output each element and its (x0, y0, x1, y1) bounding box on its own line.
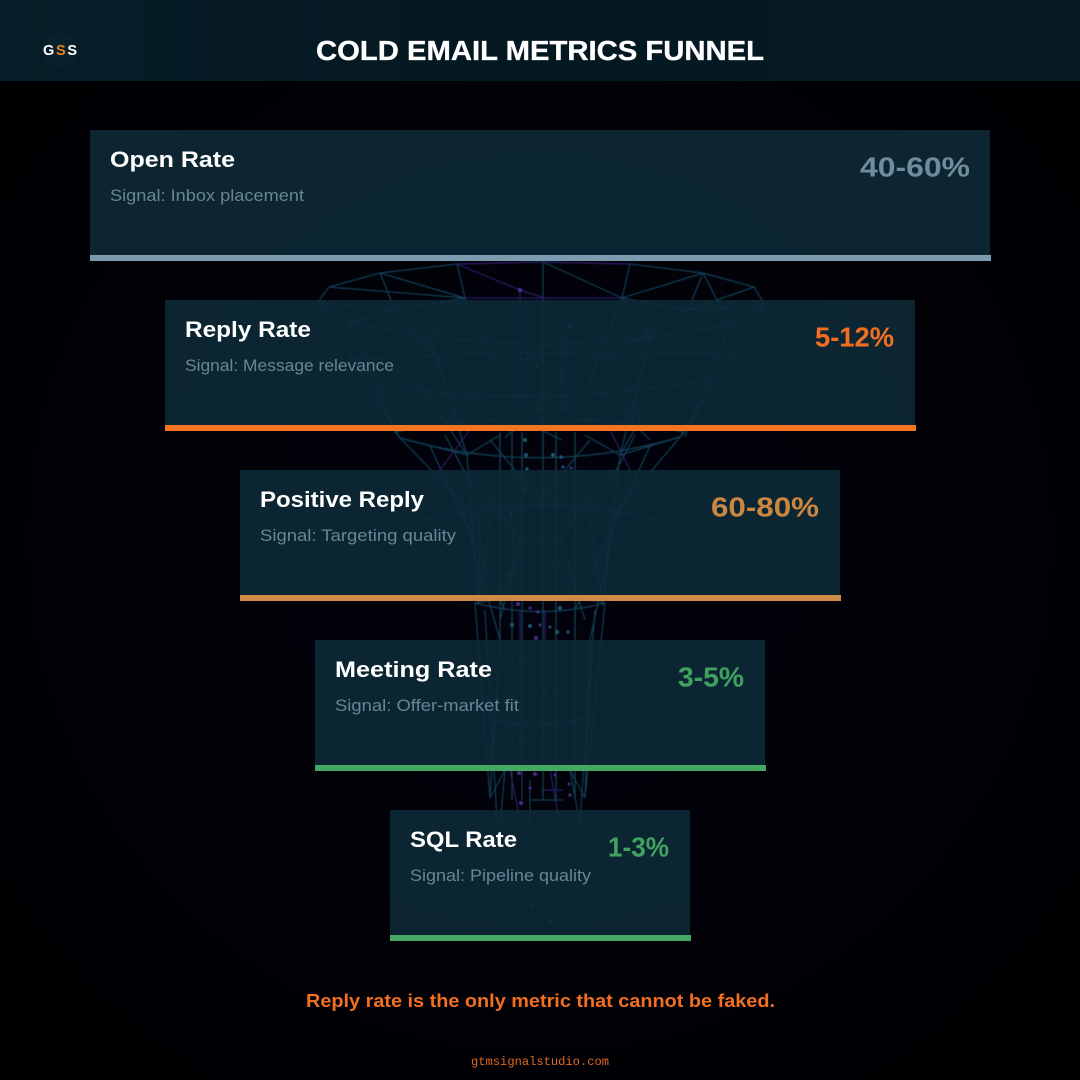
funnel wireframe illustration (318, 262, 765, 923)
funnel stage: Reply Rate: Signal: Message relevance (185, 356, 394, 375)
funnel stage: SQL Rate (390, 810, 691, 941)
funnel stage: Positive Reply (240, 470, 841, 601)
funnel stage: Open Rate (90, 130, 991, 261)
funnel stage: Open Rate: Signal: Inbox placement (110, 186, 304, 205)
funnel stage: Meeting Rate: Signal: Offer-market fit (335, 696, 519, 715)
header bar (0, 0, 1080, 81)
funnel stage: Meeting Rate (315, 640, 766, 771)
funnel stage: SQL Rate: 1-3% (608, 832, 669, 862)
funnel stage: Positive Reply: Positive Reply (260, 487, 425, 512)
funnel stage: Positive Reply: Signal: Targeting quality (260, 526, 457, 545)
funnel stage: Open Rate: 40-60% (860, 152, 970, 182)
funnel stage: Positive Reply: 60-80% (711, 492, 819, 522)
funnel stage: Meeting Rate: Meeting Rate (335, 657, 492, 682)
logo: GSS: GSS (43, 43, 77, 59)
funnel stage: Open Rate: Open Rate (110, 147, 235, 172)
funnel stage: Reply Rate (165, 300, 916, 431)
funnel stage: Reply Rate: 5-12% (815, 322, 894, 352)
callout: Reply rate is the only metric that cannot be faked. (306, 991, 775, 1011)
funnel stage: Meeting Rate: 3-5% (678, 662, 744, 692)
funnel stage: SQL Rate: SQL Rate (410, 827, 517, 852)
footer url: gtmsignalstudio.com (471, 1055, 609, 1069)
funnel stage: Reply Rate: Reply Rate (185, 317, 311, 342)
title: COLD EMAIL METRICS FUNNEL (316, 35, 764, 66)
logo: GSS (42, 32, 78, 68)
funnel stage: SQL Rate: Signal: Pipeline quality (410, 866, 592, 885)
